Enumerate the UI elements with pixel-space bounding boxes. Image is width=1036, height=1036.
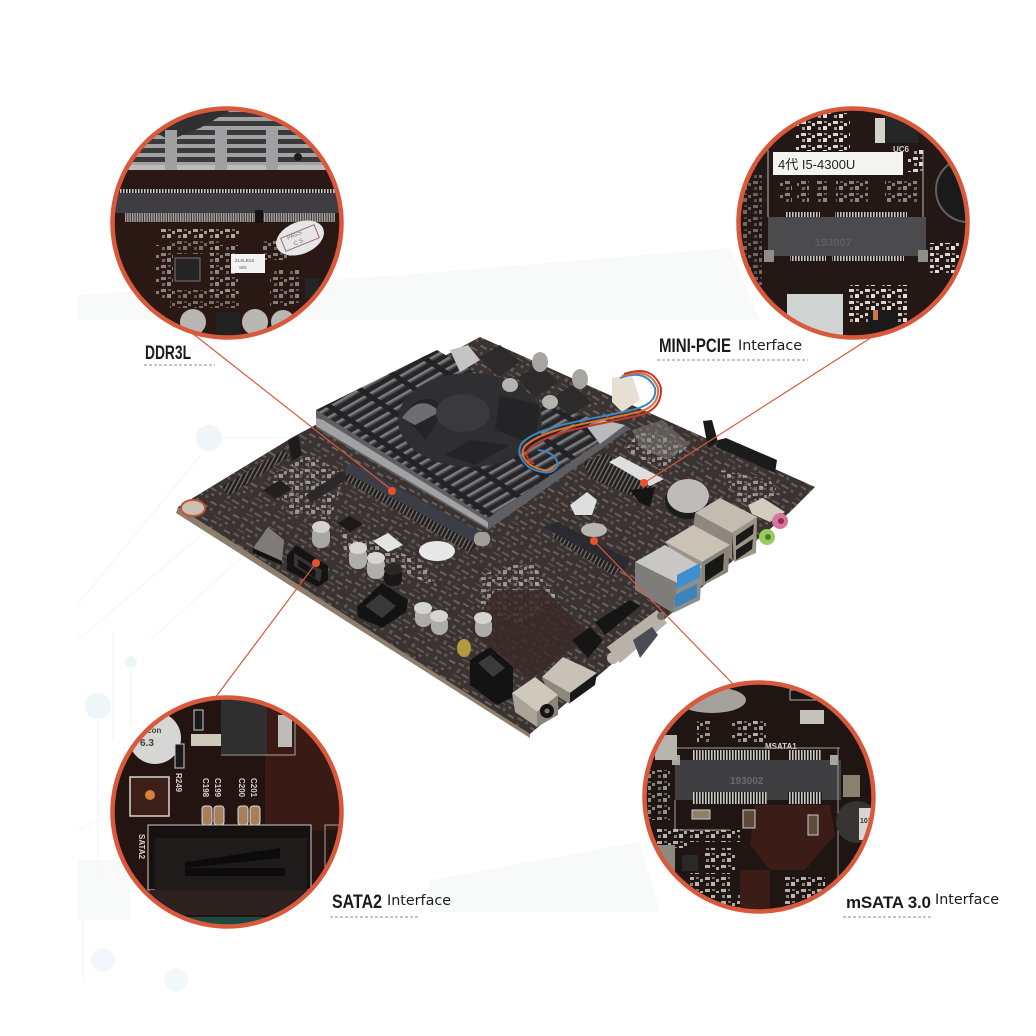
RJ45 LAN port <box>665 525 730 586</box>
small chip group near fan plug <box>632 420 690 460</box>
cap labels: C200 <box>237 778 246 798</box>
mini-PCIe slot close-up <box>764 217 928 262</box>
chip upper left <box>263 480 292 499</box>
capacitor right: 101 <box>860 818 872 825</box>
double USB port <box>693 498 757 562</box>
label: mSATA 3.0 Interface: mSATA 3.0 <box>846 893 931 912</box>
mSATA slot close-up: 193002 <box>730 776 764 787</box>
label: SATA2 Interface: Interface <box>387 893 451 909</box>
small caps <box>692 810 818 835</box>
sticker <box>419 541 455 561</box>
label: SATA2 Interface: SATA2 <box>332 892 382 913</box>
left edge components <box>742 175 762 285</box>
chip <box>885 117 918 143</box>
panel: DDR3L close-up <box>105 100 350 345</box>
speckled components top <box>795 113 850 151</box>
label: mSATA 3.0 Interface: Interface <box>935 892 999 908</box>
panel: mSATA close-up <box>640 678 880 918</box>
resistor <box>194 710 203 730</box>
capacitor labels <box>780 181 917 202</box>
leader line: MINI-PCIE <box>640 337 872 487</box>
printed component texture <box>178 337 815 734</box>
panel: MINI-PCIE close-up: UC6 <box>893 145 910 154</box>
leader line: DDR3L <box>192 333 396 495</box>
small mounting latch <box>306 471 349 503</box>
SATA connector <box>287 545 328 587</box>
capacitor <box>132 716 181 764</box>
black jumper <box>288 435 302 461</box>
4-pin power connector <box>470 647 513 705</box>
silver capacitors <box>312 521 492 637</box>
coin battery <box>665 479 709 519</box>
upper pins <box>693 750 822 760</box>
capacitor: 6.3 <box>140 738 154 749</box>
front panel pin header <box>253 527 284 565</box>
audio jacks <box>748 498 788 545</box>
voltage regulator <box>221 698 295 755</box>
leader line: SATA2 <box>215 559 320 698</box>
red ring <box>112 698 342 926</box>
blue USB 3.0 ports <box>635 545 702 613</box>
motherboard illustration <box>176 337 815 738</box>
right pads <box>843 775 860 797</box>
inductors and capacitors <box>450 345 592 416</box>
capacitor right <box>836 801 878 843</box>
mSATA pins <box>552 530 622 576</box>
mini-PCIe slot close-up: 193007 <box>815 237 852 249</box>
white sticker <box>276 220 324 256</box>
chip right <box>305 278 319 298</box>
silver pad <box>787 294 843 335</box>
mini-PCIe slot <box>583 453 664 507</box>
cap labels: C201 <box>249 778 258 798</box>
label: DDR3L: DDR3L <box>145 343 191 364</box>
DDR3L slot bar <box>345 463 492 548</box>
CPU label <box>773 152 903 175</box>
R249 resistor <box>175 744 184 768</box>
CPU label: 4代 I5-4300U <box>778 157 855 172</box>
right outline <box>324 824 338 868</box>
R249 label: R249 <box>174 773 183 793</box>
chip <box>175 258 200 281</box>
right components <box>930 243 960 273</box>
fan headers <box>357 583 408 628</box>
white label <box>231 254 265 273</box>
components lower left <box>655 828 740 909</box>
label: MINI-PCIE Interface: MINI-PCIE <box>659 336 731 357</box>
red ring <box>738 108 968 338</box>
small caps <box>202 806 260 825</box>
pin row header <box>222 450 289 496</box>
copper octagon <box>750 805 835 870</box>
test pad box <box>130 777 169 816</box>
chip <box>337 516 363 532</box>
panel: SATA2 close-up <box>105 690 350 935</box>
crystal <box>688 688 746 713</box>
black header <box>716 438 777 473</box>
background: pale geometric bands and circuit traces <box>78 248 760 992</box>
label: mSATA 3.0 Interface <box>843 892 999 917</box>
yellow jumper <box>457 639 471 657</box>
red ring <box>112 108 342 338</box>
black header beside VGA <box>572 627 603 658</box>
components <box>155 228 300 308</box>
cap labels: C199 <box>213 778 222 798</box>
mSATA slot close-up <box>672 755 841 800</box>
capacitor: icon <box>145 726 162 735</box>
crystal <box>581 523 607 537</box>
lower pins <box>693 792 822 804</box>
silver corner plate <box>587 420 625 444</box>
connector label: SATA2 <box>137 834 146 860</box>
black strip above VGA <box>595 600 640 635</box>
heatsink close-up <box>128 110 326 170</box>
white silkscreen clusters <box>270 430 780 625</box>
left pads <box>648 770 670 820</box>
HDMI port <box>542 657 597 704</box>
outline <box>768 150 923 217</box>
black angled jumper <box>703 420 718 448</box>
fan wires <box>519 371 661 472</box>
slot outline <box>675 748 840 890</box>
board surface <box>178 337 815 734</box>
dark copper zone <box>470 590 590 680</box>
heatsink fins <box>316 350 622 518</box>
small pad <box>191 734 221 746</box>
heatsink side <box>316 410 628 530</box>
fan plug <box>612 375 640 412</box>
lower body <box>150 890 310 915</box>
bottom capacitors <box>180 309 292 335</box>
memory pins <box>345 470 477 553</box>
DC power jack <box>512 677 558 727</box>
white sticker: C S <box>293 238 304 247</box>
top components <box>697 690 824 744</box>
board edge thickness <box>176 507 530 738</box>
slot pins <box>785 212 907 217</box>
components lower right <box>783 875 825 907</box>
white plate <box>570 492 597 515</box>
mSATA slot bar <box>543 522 630 571</box>
memory slot close-up <box>112 189 347 223</box>
silk label: MSATA1 <box>765 742 797 751</box>
cap labels: C198 <box>201 778 210 798</box>
white label: S/N <box>239 265 247 270</box>
white label: ZLSLB1S <box>235 258 254 263</box>
mounting hole <box>181 500 205 516</box>
white label <box>373 533 403 552</box>
label: MINI-PCIE Interface <box>657 336 808 360</box>
fan <box>398 373 542 467</box>
red ring <box>644 682 874 912</box>
leader line: mSATA <box>590 537 733 684</box>
label: SATA2 Interface <box>330 892 451 917</box>
label: MINI-PCIE Interface: Interface <box>738 338 802 354</box>
components lower right <box>849 285 907 322</box>
panel: MINI-PCIE close-up <box>736 106 970 340</box>
heatsink edge highlight <box>316 418 488 528</box>
cap labels <box>201 778 258 798</box>
white sticker: PASS <box>286 230 303 242</box>
SATA connector close-up <box>148 825 311 890</box>
coin cell <box>935 164 966 223</box>
VGA port <box>607 610 667 664</box>
